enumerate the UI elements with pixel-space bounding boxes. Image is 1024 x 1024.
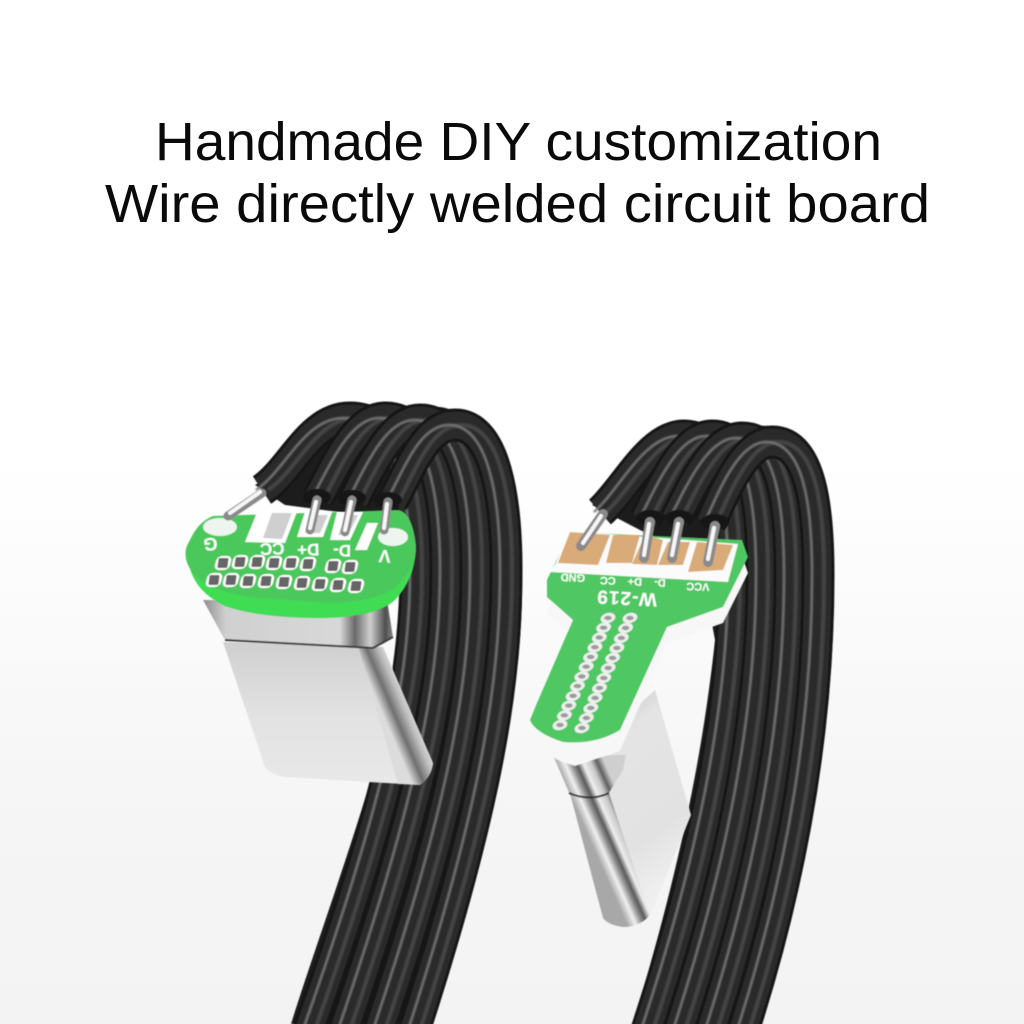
contact holes (551, 611, 639, 735)
board labels (560, 571, 710, 610)
title line two: Wire directly welded circuit board (105, 174, 930, 234)
solder pads (203, 509, 408, 550)
wire pins (581, 510, 729, 562)
board labels: G (203, 534, 218, 554)
wire pins (228, 489, 402, 532)
board labels: CC (260, 539, 285, 558)
left cable: black wires (255, 404, 522, 1024)
board labels: VCC (686, 580, 710, 592)
cylinder shell (553, 755, 650, 927)
right connector: metal plate and cylinder (553, 690, 691, 927)
left connector: metal USB-C plug (203, 600, 433, 785)
board labels: GND (560, 571, 585, 583)
board labels: W-219 (596, 585, 658, 610)
right cable: black wires (592, 422, 834, 1024)
left circuit board (185, 489, 416, 618)
board labels: D- (654, 576, 666, 588)
board labels: V (378, 546, 391, 566)
board white edge (530, 548, 748, 766)
contact pad grid (205, 555, 365, 593)
board face (185, 510, 416, 603)
right circuit board (530, 510, 748, 766)
copper pads (558, 532, 733, 572)
board edge (189, 535, 416, 618)
board labels (203, 534, 391, 566)
plug collar (203, 600, 393, 648)
board labels: D+ (297, 540, 320, 559)
pad backing (550, 531, 738, 582)
plug side edge (358, 646, 433, 785)
board labels: D- (333, 541, 351, 560)
flat plate (600, 690, 691, 915)
plug shell (223, 642, 433, 785)
left cable silhouette (255, 404, 522, 1024)
title line one: Handmade DIY customization (155, 112, 882, 172)
board labels: D+ (628, 575, 642, 587)
right cable silhouette (592, 422, 834, 1024)
board labels: CC (600, 574, 616, 586)
title (105, 112, 930, 234)
board face (530, 532, 748, 742)
